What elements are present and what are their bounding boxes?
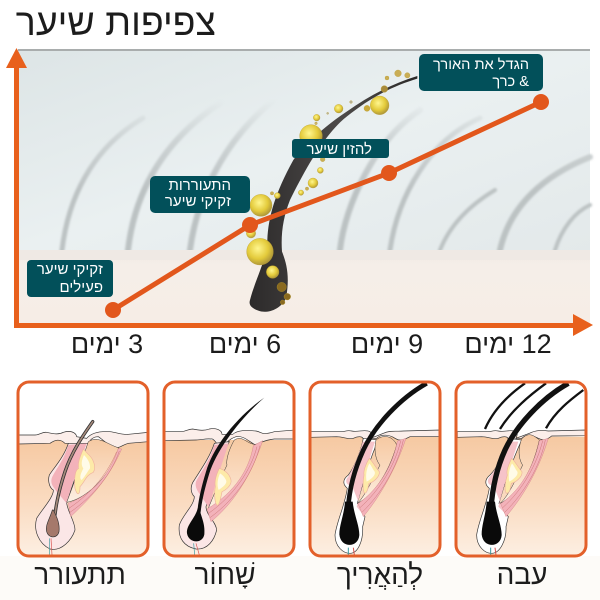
y axis arrow xyxy=(6,48,27,328)
x axis labels: 3 ימים xyxy=(71,329,143,359)
panel: thicken xyxy=(456,382,587,558)
callout: nourish hair xyxy=(292,139,389,158)
x axis labels: 9 ימים xyxy=(351,329,423,359)
chart background photo: scalp and hair xyxy=(18,49,590,324)
callout: awakening follicles xyxy=(150,176,250,213)
large oil droplets xyxy=(246,70,410,305)
panel label: thicken: עבה xyxy=(497,559,547,590)
panel: lengthen xyxy=(309,382,441,558)
panel: blacken xyxy=(163,382,295,558)
panel label: lengthen: לְהַאֲרִיך xyxy=(337,559,423,590)
callout: active follicles: פעילים xyxy=(60,279,103,296)
callout: active follicles: זקיקי שיער xyxy=(37,261,103,278)
x axis arrow xyxy=(14,314,593,336)
title: צפיפות שיער xyxy=(16,1,216,43)
callout: awakening follicles: התעוררות xyxy=(169,177,231,194)
growth line xyxy=(105,94,549,318)
callout: increase length and volume: הגדל את האורך xyxy=(433,56,529,73)
callout: nourish hair: להזין שיער xyxy=(306,141,372,158)
panel label: blacken: שָׁחוֹר xyxy=(194,559,256,590)
x axis labels xyxy=(71,329,552,359)
panel label: awaken: תתעורר xyxy=(34,559,126,590)
chart: hair growth over time xyxy=(6,48,593,359)
callout: awakening follicles: זקיקי שיער xyxy=(165,193,231,210)
callout: active follicles xyxy=(27,260,113,297)
hair strand with oil droplets xyxy=(246,70,417,312)
callout: increase length and volume xyxy=(419,54,543,91)
x axis labels: 12 ימים xyxy=(464,329,552,359)
x axis labels: 6 ימים xyxy=(209,329,281,359)
panel: awaken xyxy=(17,382,149,558)
callout: increase length and volume: & כרך xyxy=(492,74,529,90)
label strip background xyxy=(0,556,600,600)
